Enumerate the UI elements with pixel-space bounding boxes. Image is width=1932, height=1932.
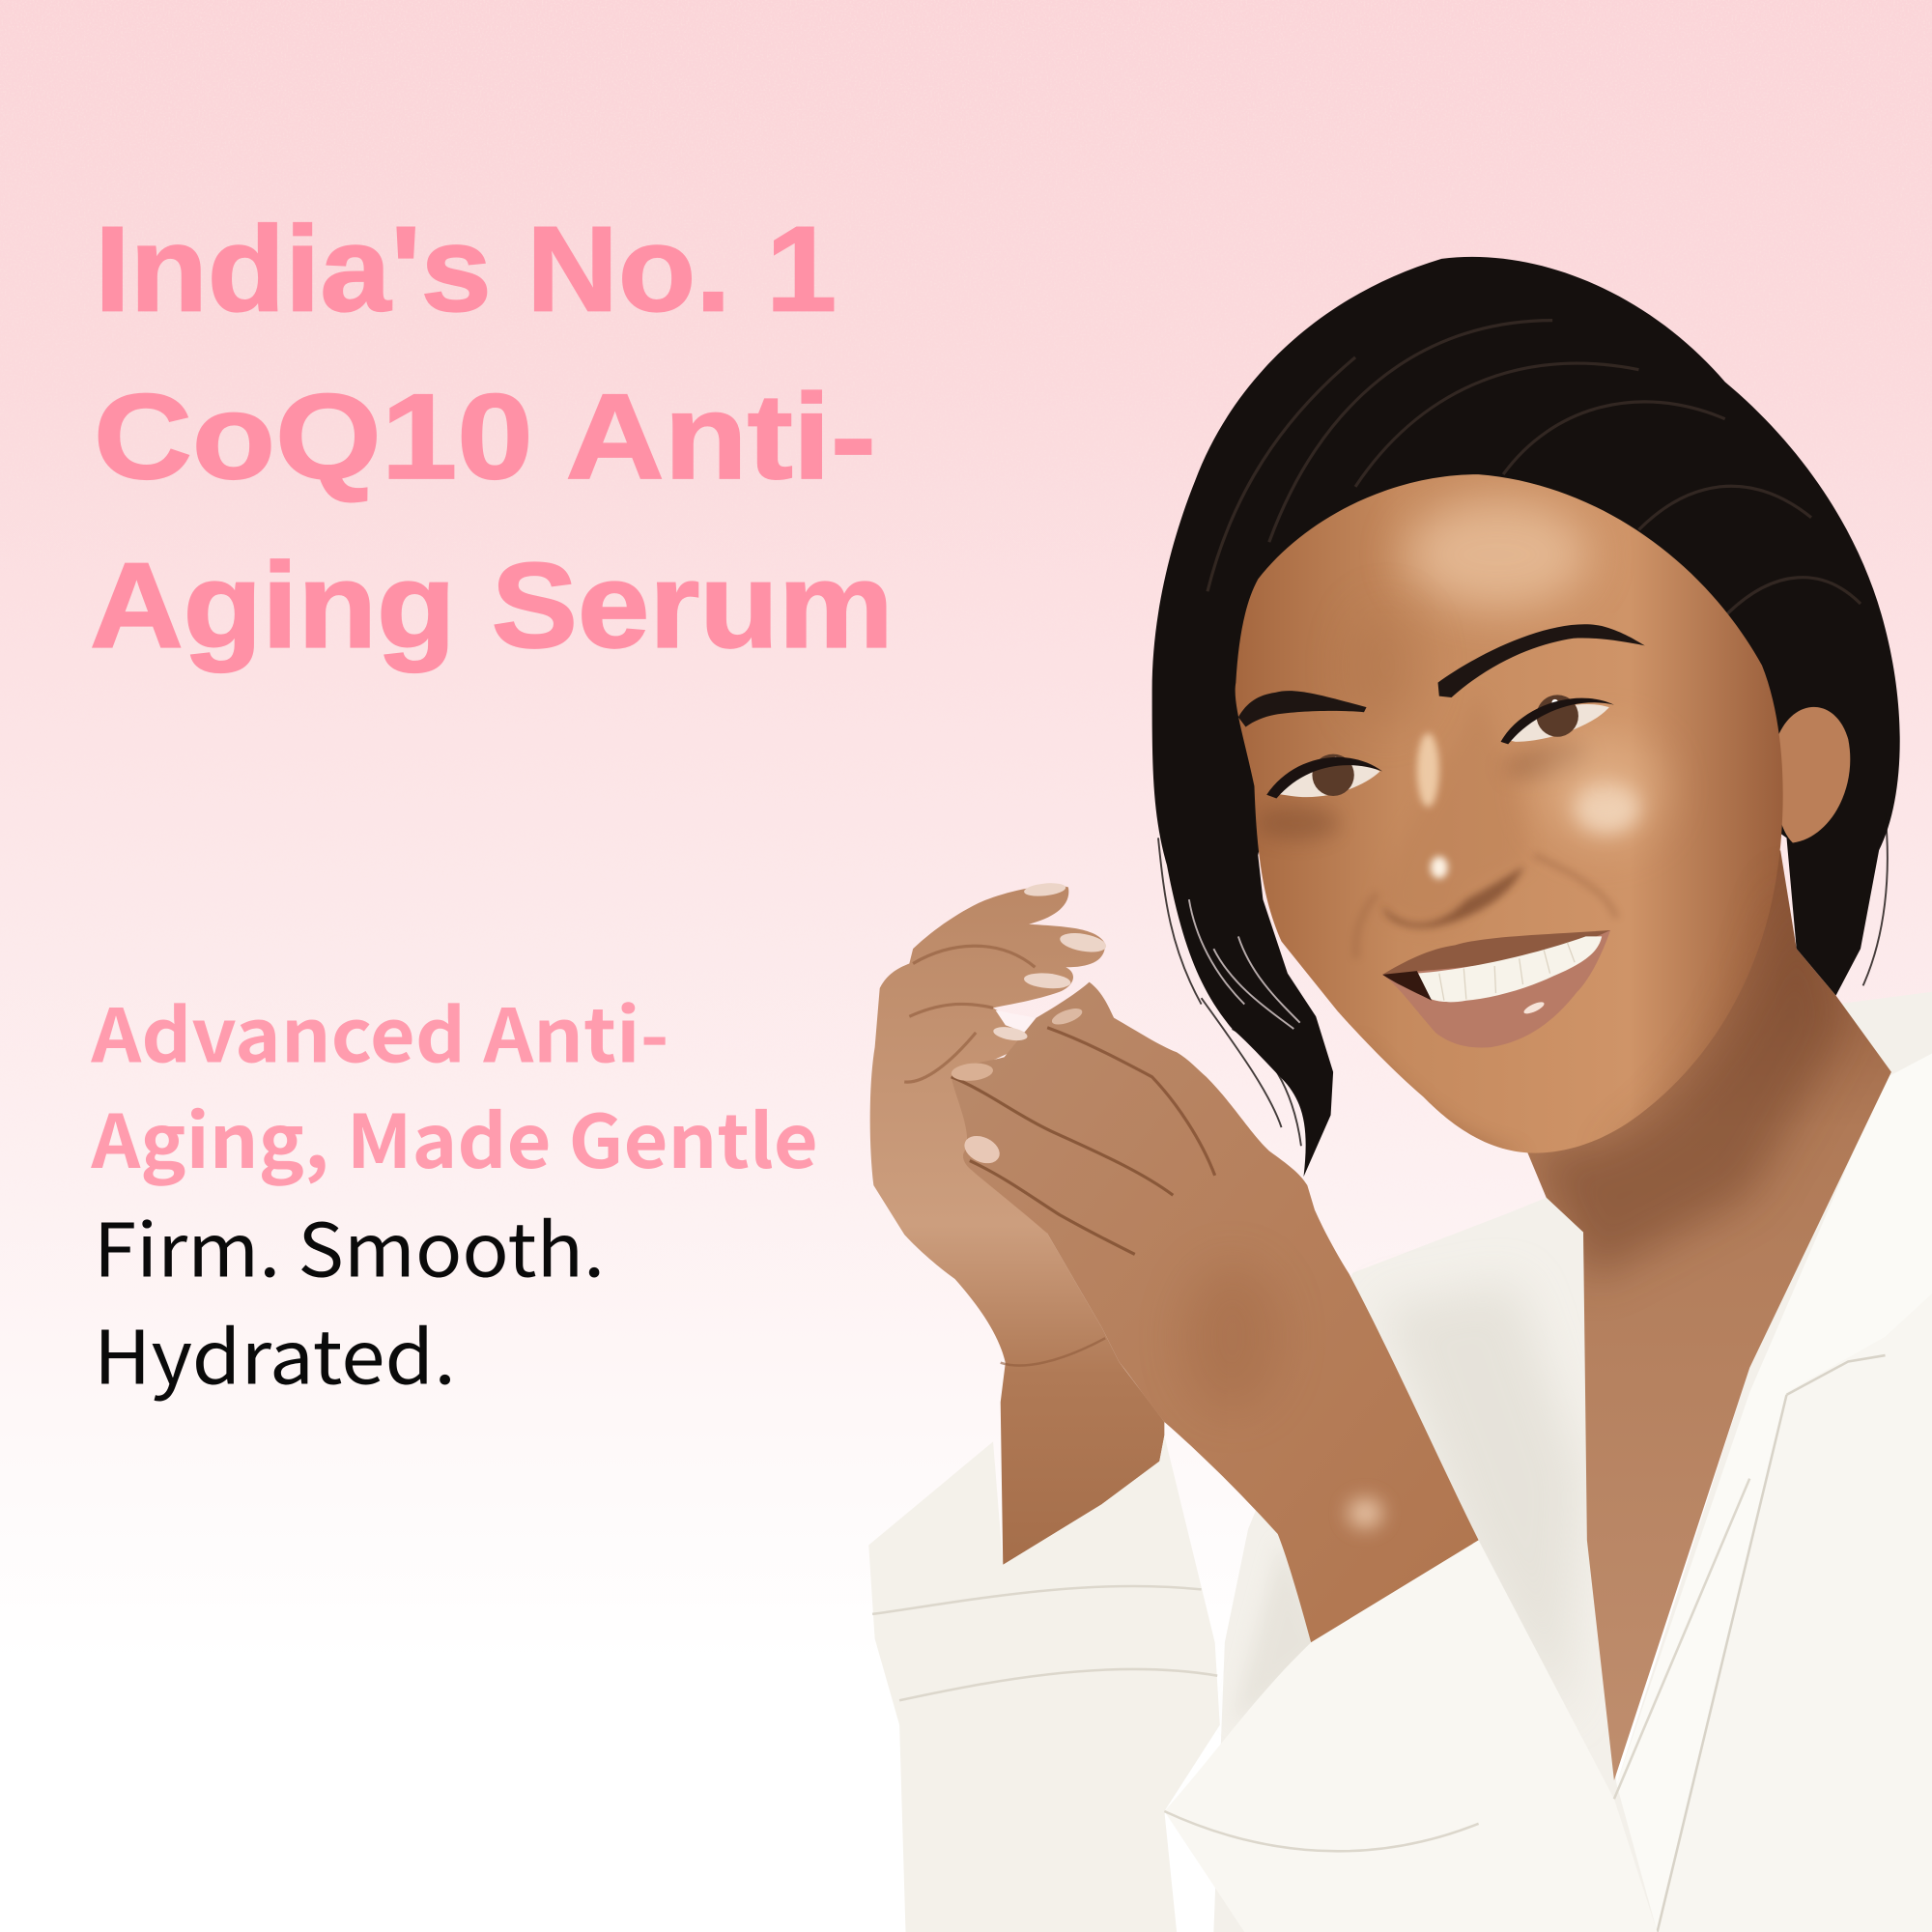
tagline: Hydrated. <box>94 1298 456 1406</box>
neck and chest skin <box>1509 850 1891 1780</box>
subheading <box>90 977 818 1190</box>
illustration: smiling woman in white blazer <box>868 257 1932 1932</box>
left sleeve cuff <box>868 1435 1220 1932</box>
title: Aging Serum <box>90 539 894 673</box>
wispy gaps in loose hair <box>1189 899 1300 1029</box>
tagline: Firm. Smooth. <box>94 1191 605 1298</box>
face <box>1236 474 1783 1153</box>
neck shadow <box>1528 863 1848 1282</box>
subheading: Advanced Anti- <box>90 977 669 1084</box>
right eye <box>1501 695 1614 744</box>
title <box>90 202 894 673</box>
hand details <box>904 881 1382 1528</box>
right hand and forearm <box>952 982 1479 1642</box>
blazer body <box>1213 992 1932 1932</box>
loose hair wisps <box>1158 813 1888 1146</box>
eyebrows <box>1238 691 1367 727</box>
left hand <box>870 886 1164 1565</box>
sleeve folds <box>872 1479 1749 1851</box>
subheading: Aging, Made Gentle <box>90 1083 818 1190</box>
tagline <box>94 1191 605 1406</box>
gap between fingers <box>996 1010 1035 1033</box>
right sleeve cuff <box>1164 1540 1658 1932</box>
hair strands <box>1208 321 1861 616</box>
ear <box>1775 707 1850 842</box>
title: India's No. 1 <box>95 202 837 336</box>
left eye <box>1266 754 1382 799</box>
title: CoQ10 Anti- <box>94 370 876 504</box>
mouth <box>1382 930 1610 1048</box>
blazer shading <box>1233 1054 1932 1932</box>
background grain <box>17 0 1907 141</box>
face shading and highlights <box>1256 499 1786 1171</box>
hair back mass <box>1152 257 1900 1177</box>
